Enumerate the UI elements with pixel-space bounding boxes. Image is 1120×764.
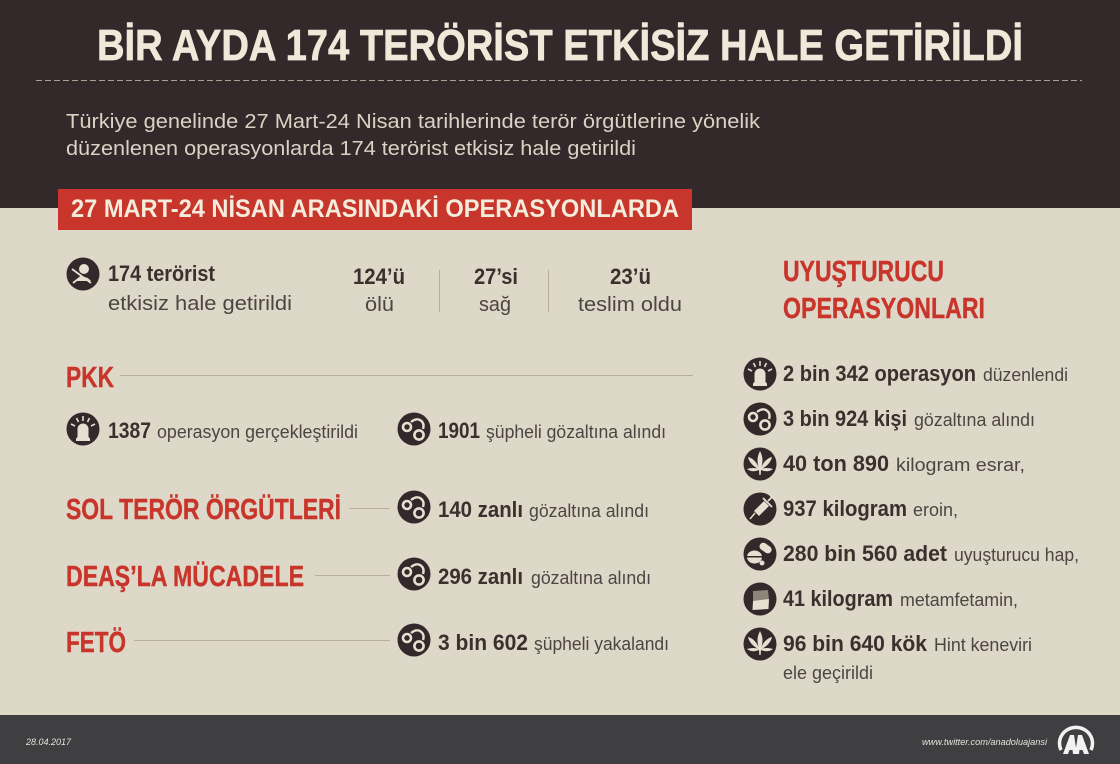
logo: AA — [1060, 727, 1092, 754]
cannabis plants — [783, 631, 1032, 683]
detained: 140 zanlı — [438, 497, 523, 522]
icon: handcuffs — [398, 624, 430, 656]
dead: 124’ü — [353, 264, 405, 289]
banner — [58, 189, 692, 230]
intro text: düzenlenen operasyonlarda 174 terörist etkisiz hale getirildi — [66, 138, 636, 160]
detained: gözaltına alındı — [531, 568, 651, 588]
intro text — [66, 111, 761, 160]
total: 174 terörist — [108, 261, 216, 286]
pills: 280 bin 560 adet — [783, 541, 948, 566]
detained: gözaltına alındı — [914, 410, 1035, 430]
date: 28.04.2017 — [25, 737, 72, 747]
captured — [474, 264, 518, 316]
icon: syringe — [744, 492, 776, 526]
operations: 1387 — [108, 418, 151, 443]
detained: gözaltına alındı — [529, 501, 649, 521]
icon: handcuffs — [744, 402, 776, 436]
footer — [0, 715, 1120, 764]
operations: 2 bin 342 operasyon — [783, 361, 976, 386]
methamphetamine: 41 kilogram — [783, 586, 893, 611]
methamphetamine: metamfetamin, — [900, 590, 1018, 610]
cannabis plants: 96 bin 640 kök — [783, 631, 928, 656]
methamphetamine — [783, 586, 1018, 611]
panel: drug operations — [744, 256, 1079, 683]
surrendered: teslim oldu — [578, 294, 682, 316]
icon: handcuffs — [398, 558, 430, 590]
panel: DEAŞ — [66, 558, 651, 593]
url: www.twitter.com/anadoluajansi — [922, 737, 1048, 748]
captured: sağ — [479, 294, 511, 316]
detained — [438, 418, 666, 443]
panel: left terror organizations — [66, 490, 649, 526]
heading: UYUŞTURUCU — [783, 256, 944, 288]
caught — [438, 630, 669, 655]
hashish — [783, 451, 1025, 476]
heading: FETÖ — [66, 626, 126, 659]
heading: SOL TERÖR ÖRGÜTLERİ — [66, 493, 341, 526]
dead: ölü — [365, 294, 394, 316]
icon: cannabis leaf — [744, 628, 776, 660]
icon: siren — [66, 412, 100, 446]
detained: şüpheli gözaltına alındı — [486, 422, 666, 442]
header band — [0, 0, 1120, 208]
detained — [438, 497, 649, 522]
icon: cannabis leaf — [744, 448, 776, 480]
hashish: kilogram esrar, — [896, 455, 1025, 475]
total — [108, 261, 292, 315]
panel: FETÖ — [66, 624, 669, 659]
heading: PKK: PKK — [66, 362, 114, 394]
panel: summary — [66, 258, 682, 316]
surrendered — [578, 264, 682, 316]
detained — [783, 406, 1035, 431]
caught: şüpheli yakalandı — [534, 634, 669, 654]
detained: 296 zanlı — [438, 564, 523, 589]
banner: 27 MART-24 NİSAN ARASINDAKİ OPERASYONLARDA — [71, 195, 679, 223]
intro text: Türkiye genelinde 27 Mart-24 Nisan tarihlerinde terör örgütlerine yönelik — [66, 111, 761, 133]
panel: PKK — [66, 362, 693, 446]
pills: uyuşturucu hap, — [954, 545, 1079, 565]
cannabis plants: ele geçirildi — [783, 663, 873, 683]
icon: neutralized terrorist — [66, 258, 100, 290]
surrendered: 23’ü — [610, 264, 651, 289]
detained — [438, 564, 651, 589]
icon: siren — [744, 358, 776, 390]
heading — [783, 256, 985, 325]
icon: handcuffs — [398, 412, 430, 446]
caught: 3 bin 602 — [438, 630, 528, 655]
operations: düzenlendi — [983, 365, 1068, 385]
operations — [108, 418, 358, 443]
heading: DEAŞ’LA MÜCADELE — [66, 560, 304, 593]
heroin: 937 kilogram — [783, 496, 907, 521]
hashish: 40 ton 890 — [783, 451, 889, 476]
heroin: eroin, — [913, 500, 958, 520]
pills — [783, 541, 1079, 566]
cannabis plants: Hint keneviri — [934, 635, 1032, 655]
captured: 27’si — [474, 264, 518, 289]
icon: meth bag — [744, 582, 776, 616]
total: etkisiz hale getirildi — [108, 293, 292, 315]
operations: operasyon gerçekleştirildi — [157, 422, 358, 442]
icon: handcuffs — [398, 490, 430, 524]
detained: 3 bin 924 kişi — [783, 406, 907, 431]
icon: pills — [744, 538, 776, 570]
heading: OPERASYONLARI — [783, 293, 985, 325]
dead — [353, 264, 405, 316]
detained: 1901 — [438, 418, 480, 443]
